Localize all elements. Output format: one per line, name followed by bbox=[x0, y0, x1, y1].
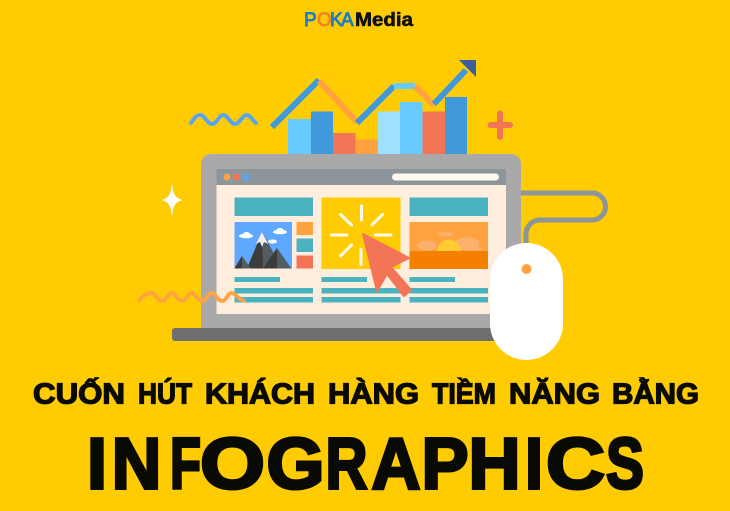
title line 2: R bbox=[326, 424, 368, 504]
title line 2: S bbox=[606, 424, 644, 504]
title line 2: F bbox=[170, 424, 201, 504]
title line 2: C bbox=[546, 424, 605, 504]
sunset picture bbox=[410, 222, 488, 269]
title line 2: P bbox=[422, 424, 468, 504]
title line 1: HÚT bbox=[138, 376, 192, 410]
bar chart bbox=[288, 97, 467, 154]
title line 1: HÀNG bbox=[328, 376, 419, 410]
logo: PokaMedia bbox=[304, 10, 413, 31]
column 3 bbox=[410, 198, 488, 302]
logo: PokaMedia: POKA bbox=[304, 10, 354, 31]
laptop body bbox=[201, 154, 521, 328]
title line 1: KHÁCH bbox=[205, 376, 315, 410]
icon: sparkle bbox=[163, 185, 181, 215]
title line 1: NĂNG bbox=[509, 377, 600, 410]
mountain picture bbox=[234, 222, 292, 268]
title line 1: CUỐN bbox=[33, 376, 125, 410]
mouse button dot bbox=[522, 264, 532, 274]
column 2 bbox=[322, 198, 400, 302]
laptop base bbox=[172, 328, 507, 341]
browser bar bbox=[216, 169, 506, 185]
title line 2: G bbox=[266, 424, 324, 504]
click rays bbox=[332, 206, 391, 264]
title line 2: H bbox=[468, 424, 520, 504]
title line 2: A bbox=[372, 424, 420, 504]
title line 1: TIỀM bbox=[432, 376, 496, 410]
title line 2: I bbox=[525, 424, 543, 504]
squiggle: blue bbox=[191, 115, 256, 124]
logo: PokaMedia: Media bbox=[355, 10, 413, 31]
title line 2: I bbox=[87, 424, 107, 504]
mouse cable bbox=[520, 193, 606, 250]
title line 1: BẰNG bbox=[612, 376, 699, 410]
title line 2: N bbox=[112, 424, 161, 504]
computer mouse bbox=[490, 243, 563, 360]
title line 2: O bbox=[200, 424, 265, 504]
icon: plus bbox=[490, 114, 510, 137]
column 1 bbox=[234, 198, 313, 302]
squiggle: orange bbox=[139, 293, 244, 301]
laptop bbox=[172, 154, 521, 341]
trend line arrow bbox=[272, 60, 476, 127]
screen bbox=[216, 169, 506, 314]
title line 1 bbox=[33, 376, 699, 410]
icon: cursor arrow bbox=[363, 234, 411, 296]
